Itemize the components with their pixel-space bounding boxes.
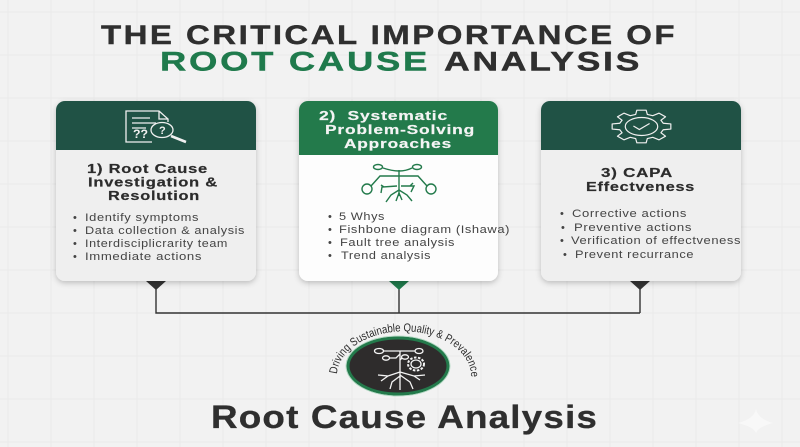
panel 1 list: • [73,251,77,263]
panel 2 header [299,101,498,155]
panel 2 list: • [328,224,332,236]
panel 2 heading: Approaches [344,136,452,151]
panel 2 list: • [328,237,332,249]
panel 3 list: • [560,235,564,247]
panel: root cause investigation [56,101,256,281]
curved tagline: Driving Sustainable Quality & Prevalence [329,323,478,376]
title: ANALYSIS [444,46,642,76]
panel 3 list: • [561,222,565,234]
icon: document with magnifier: ? [159,125,166,137]
panel 1 heading: Resolution [108,188,200,203]
panel 1 list: Identify symptoms [85,212,199,224]
panel 2 list: 5 Whys [339,211,385,223]
panel 1 heading [87,161,218,203]
panel 1 list [73,212,245,263]
icon: root tree [362,164,436,202]
panel 3 list [560,208,741,261]
panel 2 heading [319,108,475,151]
panel 3 header [541,101,741,150]
panel 3 list: Corrective actions [572,208,687,220]
panel 1 list: Interdisciplicrarity team [85,238,228,250]
panel 2 list: Fault tree analysis [340,237,455,249]
panel 1 list: • [73,212,77,224]
icon: document with magnifier [126,111,186,142]
panel 3 list: Preventive actions [574,222,692,234]
panel 3 list: Prevent recurrance [575,249,694,261]
panel 3 list: • [560,208,564,220]
panel 2 list [328,211,510,262]
icon: gear with check [612,110,671,143]
panel 2 heading: Problem-Solving [325,122,475,137]
panel 2 list: Trend analysis [341,250,431,262]
panel 1 list: • [73,238,77,250]
title: ROOT CAUSE [160,46,430,76]
panel 1 list: Immediate actions [85,251,202,263]
icon: sparkle watermark [738,409,773,433]
panel 1 header [56,101,256,150]
panel 3 list: • [563,249,567,261]
panel 2 list: • [328,250,332,262]
connector arrows [146,281,650,313]
icon: document with magnifier: ?? [133,127,148,141]
panel 2 heading: 2) Systematic [319,108,448,123]
panel 1 list: • [73,225,77,237]
panel 2 list: • [328,211,332,223]
panel 1 heading: 1) Root Cause [87,161,208,176]
panel 3 heading [586,165,695,194]
panel 3 heading: 3) CAPA [601,165,673,180]
panel 3 list: Verification of effectveness [571,235,741,247]
badge: root cause emblem [329,323,478,396]
panel 1 list: Data collection & analysis [85,225,245,237]
title [101,20,677,76]
icon: tree with roots and gear [374,348,425,390]
panel 2 list: Fishbone diagram (Ishawa) [339,224,510,236]
panel: systematic approaches [299,101,510,281]
panel 3 heading: Effectveness [586,179,695,194]
panel 1 heading: Investigation & [88,174,218,190]
panel: capa effectiveness [541,101,741,281]
footer title: Root Cause Analysis [211,399,598,435]
title: THE CRITICAL IMPORTANCE OF [101,20,677,50]
